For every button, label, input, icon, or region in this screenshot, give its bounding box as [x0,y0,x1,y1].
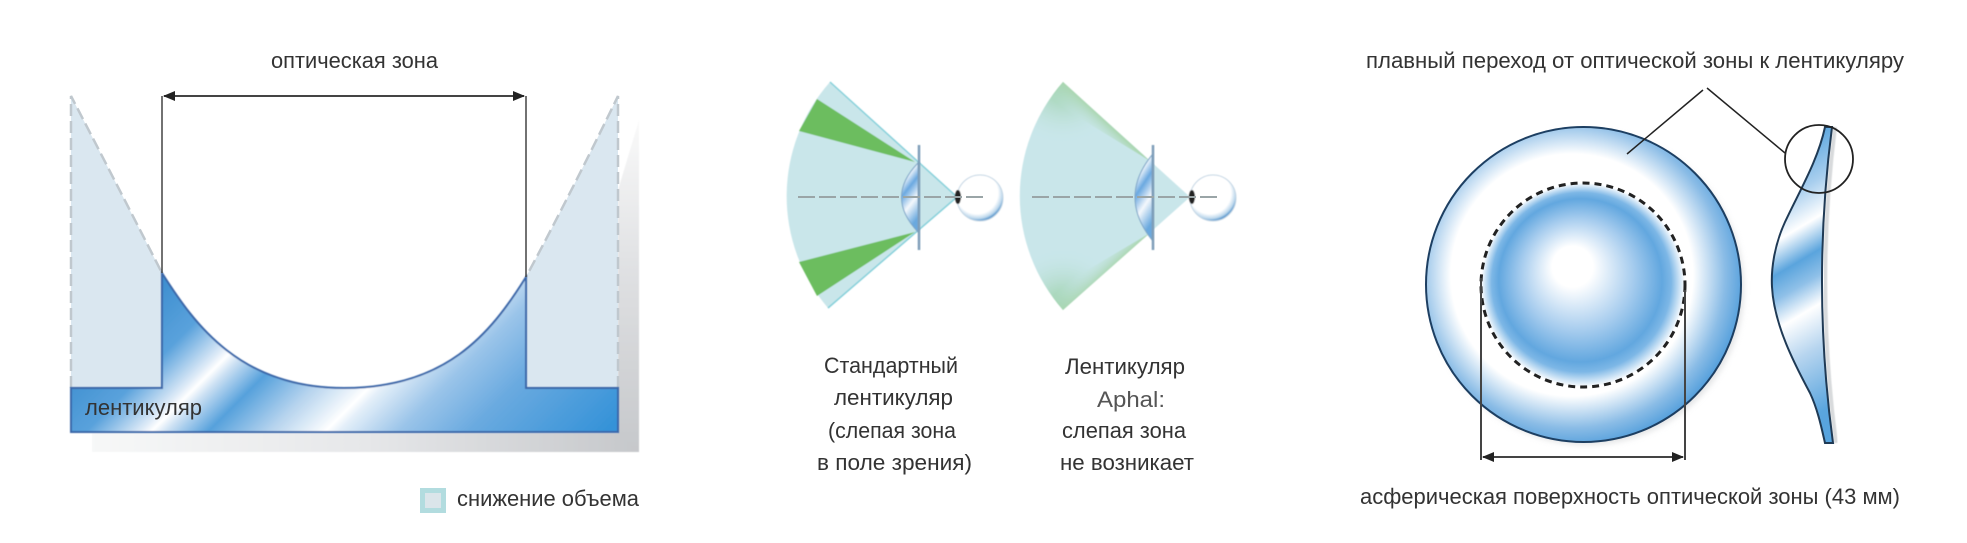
detail circle [1785,125,1853,193]
caption: standard lenticular [817,353,972,475]
lens side view [1772,127,1836,443]
dashed outline [71,96,618,388]
volume reduction area right [526,96,618,388]
panel: standard lenticular field of view [787,82,1003,475]
leader lines [1627,88,1785,154]
heading: smooth transition: плавный переход от оптической зоны к лентикуляру [1366,48,1904,73]
lenticular lens body [71,273,618,432]
drop shadow [92,120,639,452]
axis dashed line [798,196,983,198]
eye [1189,175,1236,221]
caption: Aphal lenticular: слепая зона [1062,418,1187,443]
panel: Aphal lenticular field of view [1020,82,1236,475]
lens front view [1426,127,1744,445]
lens [902,145,919,250]
heading: optical zone: оптическая зона [271,48,439,73]
panel: lenticular diagram [71,48,640,511]
panel: aspheric lens front and side view [1360,48,1904,509]
caption: standard lenticular: (слепая зона [828,418,957,443]
field of view fan without blind zones [1020,82,1190,310]
caption: Aphal lenticular: Лентикуляр [1065,354,1185,379]
eye [955,175,1003,221]
label: lenticular: лентикуляр [85,395,202,420]
caption: standard lenticular: в поле зрения) [817,450,972,475]
caption: Aphal lenticular: Aphal: [1097,387,1165,412]
volume reduction area left [71,96,162,388]
caption: standard lenticular: Стандартный [824,353,958,378]
dimension: aspheric optical zone [1481,278,1685,460]
dimension: optical zone arrow [162,96,526,277]
lens [1135,145,1153,250]
legend: volume reduction: снижение объема [457,486,640,511]
caption: Aphal lenticular: не возникает [1060,450,1194,475]
caption: Aphal lenticular [1060,354,1194,475]
caption: standard lenticular: лентикуляр [834,385,953,410]
field of view fan with blind zones [787,82,957,308]
axis dashed line [1032,196,1217,198]
caption: aspheric surface: асферическая поверхность оптической зоны (43 мм) [1360,484,1900,509]
